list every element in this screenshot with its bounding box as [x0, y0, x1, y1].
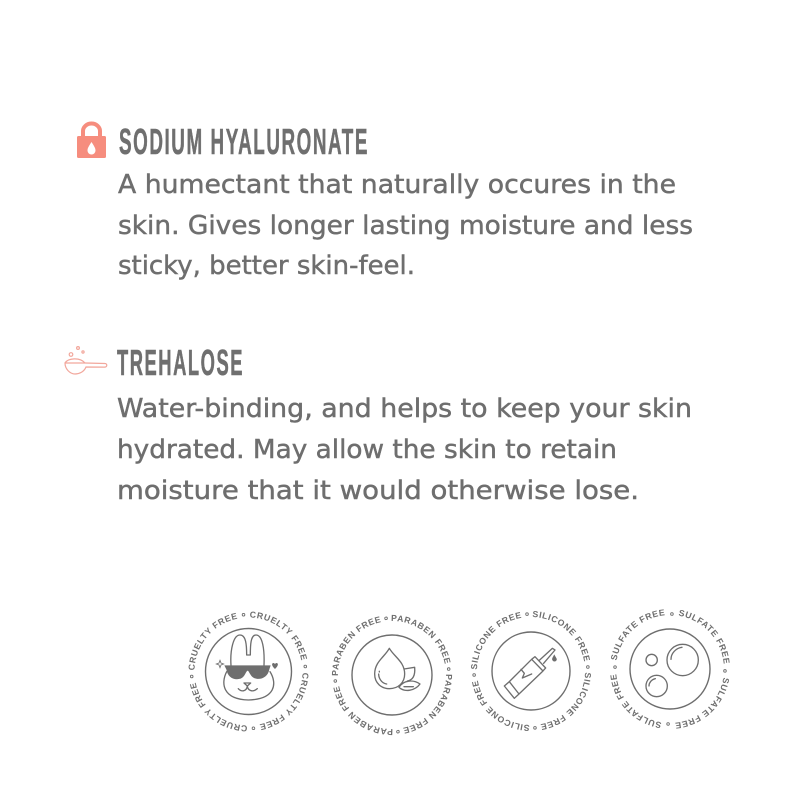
badge: sulfate free: SULFATE FREE	[610, 674, 662, 728]
badge: cruelty free: CRUELTY FREE	[188, 612, 238, 670]
badge: silicone free: SILICONE FREE	[532, 611, 590, 662]
heading: sodium hyaluronate: SODIUM HYALURONATE	[119, 121, 369, 162]
icon: scoop with powder	[65, 347, 107, 374]
text block: sodium hyaluronate description: A humectant that naturally occures in the	[118, 170, 676, 200]
badge: cruelty free	[188, 612, 308, 732]
badge: sulfate free: SULFATE FREE	[678, 610, 730, 664]
text block: trehalose description: Water-binding, and helps to keep your skin	[117, 394, 692, 424]
badge: silicone free: SILICONE FREE	[540, 672, 591, 730]
heading: trehalose: TREHALOSE	[117, 342, 244, 383]
badge: paraben free: PARABEN FREE	[334, 686, 392, 736]
badge: sulfate free	[610, 609, 730, 729]
badge: cruelty free: CRUELTY FREE	[250, 612, 307, 660]
text block: sodium hyaluronate description	[118, 170, 693, 281]
badge: paraben free: PARABEN FREE	[403, 674, 452, 734]
badge: sulfate free: SULFATE FREE	[611, 609, 665, 660]
text block: sodium hyaluronate description: sticky, better skin-feel.	[118, 251, 415, 281]
icon: padlock with water drop	[77, 124, 106, 158]
text block: trehalose description: hydrated. May allow the skin to retain	[117, 435, 617, 465]
badge: paraben free: PARABEN FREE	[332, 616, 381, 676]
badge: silicone free	[471, 611, 591, 731]
badge: cruelty free: CRUELTY FREE	[190, 682, 247, 732]
badge: silicone free: SILICONE FREE	[471, 612, 522, 670]
text block: trehalose description	[117, 394, 692, 506]
badge: paraben free: PARABEN FREE	[392, 614, 450, 664]
text block: trehalose description: moisture that it would otherwise lose.	[117, 476, 639, 506]
badge: cruelty free: CRUELTY FREE	[260, 673, 308, 730]
text block: sodium hyaluronate description: skin. Gives longer lasting moisture and less	[118, 211, 693, 241]
badge: sulfate free: SULFATE FREE	[675, 678, 729, 729]
badge: silicone free: SILICONE FREE	[472, 680, 530, 731]
badge: paraben free	[332, 614, 452, 736]
